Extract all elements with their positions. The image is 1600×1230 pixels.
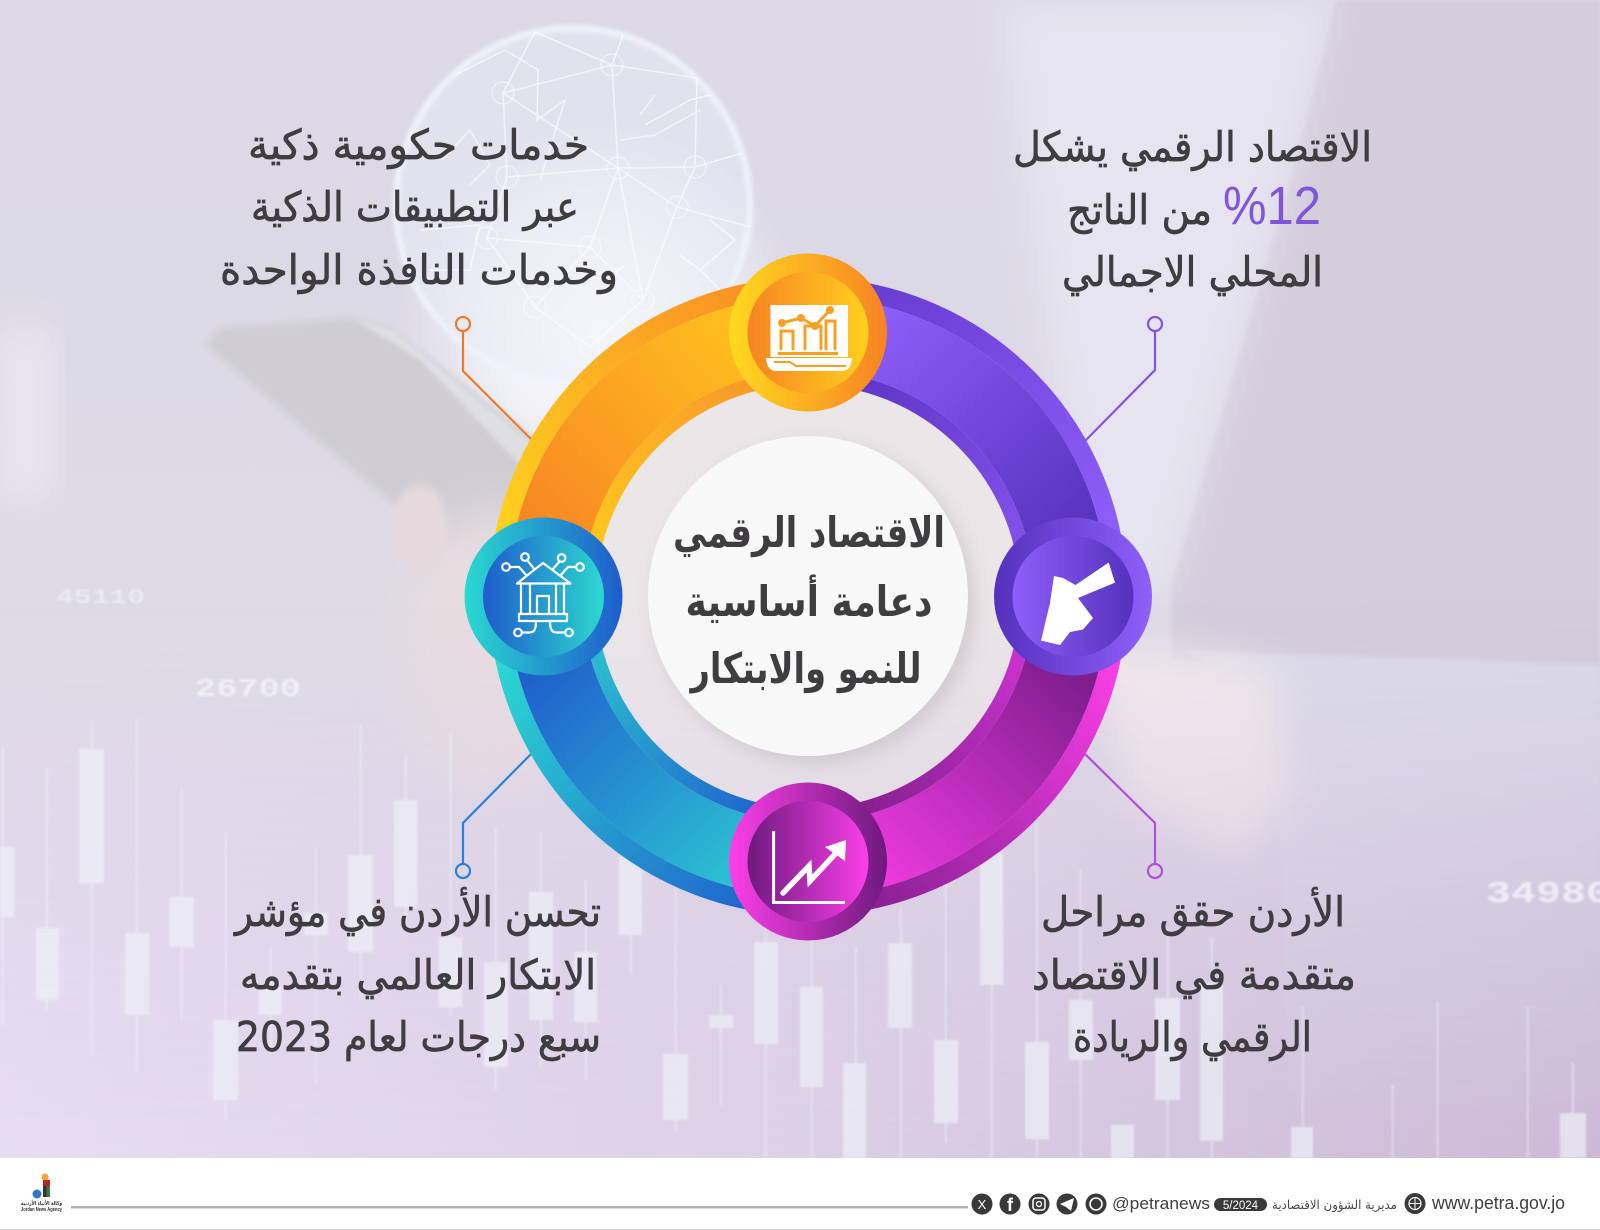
text: top left: وخدمات النافذة الواحدة xyxy=(220,246,618,294)
text: top right with 12%: من الناتج xyxy=(1067,186,1212,234)
globe network xyxy=(396,28,750,382)
date pill: 5/2024 xyxy=(1223,1200,1259,1212)
social icons: X xyxy=(978,1197,987,1212)
text: bottom right xyxy=(1032,886,1356,1062)
centre title xyxy=(673,508,945,694)
footer handle: @petranews xyxy=(1112,1194,1210,1213)
node: top, chart on laptop icon xyxy=(729,254,887,412)
text: bottom right: الأردن حقق مراحل xyxy=(1041,886,1345,936)
centre title: للنمو والابتكار xyxy=(689,644,922,694)
text: top left: خدمات حكومية ذكية xyxy=(248,121,589,169)
text: top left: عبر التطبيقات الذكية xyxy=(251,183,579,231)
node: right, Jordan map icon xyxy=(994,518,1152,676)
text: bottom left: سبع درجات لعام 2023 xyxy=(236,1013,601,1061)
social icons: f xyxy=(1007,1195,1014,1215)
background ticker numbers: 34980 xyxy=(1486,877,1600,912)
footer bar xyxy=(0,1158,1600,1230)
department name: مديرية الشؤون الاقتصادية xyxy=(1272,1197,1397,1213)
logo: Jordan News Agency: وكالة الأنباء الأردنية xyxy=(21,1199,62,1207)
node: left, connected bank icon xyxy=(464,518,622,676)
ring: blue segment xyxy=(498,596,808,906)
connector: magenta xyxy=(1085,754,1162,878)
logo: Jordan News Agency: Jordan News Agency xyxy=(21,1207,63,1213)
icon: web globe xyxy=(1404,1193,1426,1214)
centre title: الاقتصاد الرقمي xyxy=(673,508,945,558)
social icons xyxy=(972,1194,1106,1215)
text: bottom left: الابتكار العالمي بتقدمه xyxy=(240,951,596,1000)
ring: orange segment xyxy=(498,287,808,596)
text: bottom left xyxy=(233,886,601,1061)
text: bottom left: تحسن الأردن في مؤشر xyxy=(233,886,601,937)
ring: magenta segment xyxy=(808,596,1118,906)
ring: purple segment xyxy=(808,287,1118,596)
text: top right with 12%: %12 xyxy=(1223,176,1321,236)
connector: orange xyxy=(456,317,531,439)
centre title: دعامة أساسية xyxy=(686,574,932,626)
text: top left xyxy=(220,121,618,294)
text: bottom right: الرقمي والريادة xyxy=(1073,1013,1312,1062)
connector: purple xyxy=(1085,317,1162,441)
centre disc xyxy=(648,436,975,763)
website: www.petra.gov.jo xyxy=(1431,1193,1565,1213)
background ticker numbers: 45110 xyxy=(56,587,145,610)
background ticker numbers xyxy=(56,587,1600,912)
candlestick chart xyxy=(0,720,1586,1158)
date pill xyxy=(1214,1198,1267,1212)
node: bottom, growth arrow icon xyxy=(729,782,887,940)
text: top right with 12%: الاقتصاد الرقمي يشكل xyxy=(1013,123,1372,172)
logo: Jordan News Agency xyxy=(21,1174,63,1213)
text: top right with 12% xyxy=(1013,123,1372,297)
text: top right with 12%: المحلي الاجمالي xyxy=(1062,248,1323,297)
text: bottom right: متقدمة في الاقتصاد xyxy=(1032,951,1356,1000)
background ticker numbers: 26700 xyxy=(195,674,301,704)
connector: blue xyxy=(456,754,531,878)
